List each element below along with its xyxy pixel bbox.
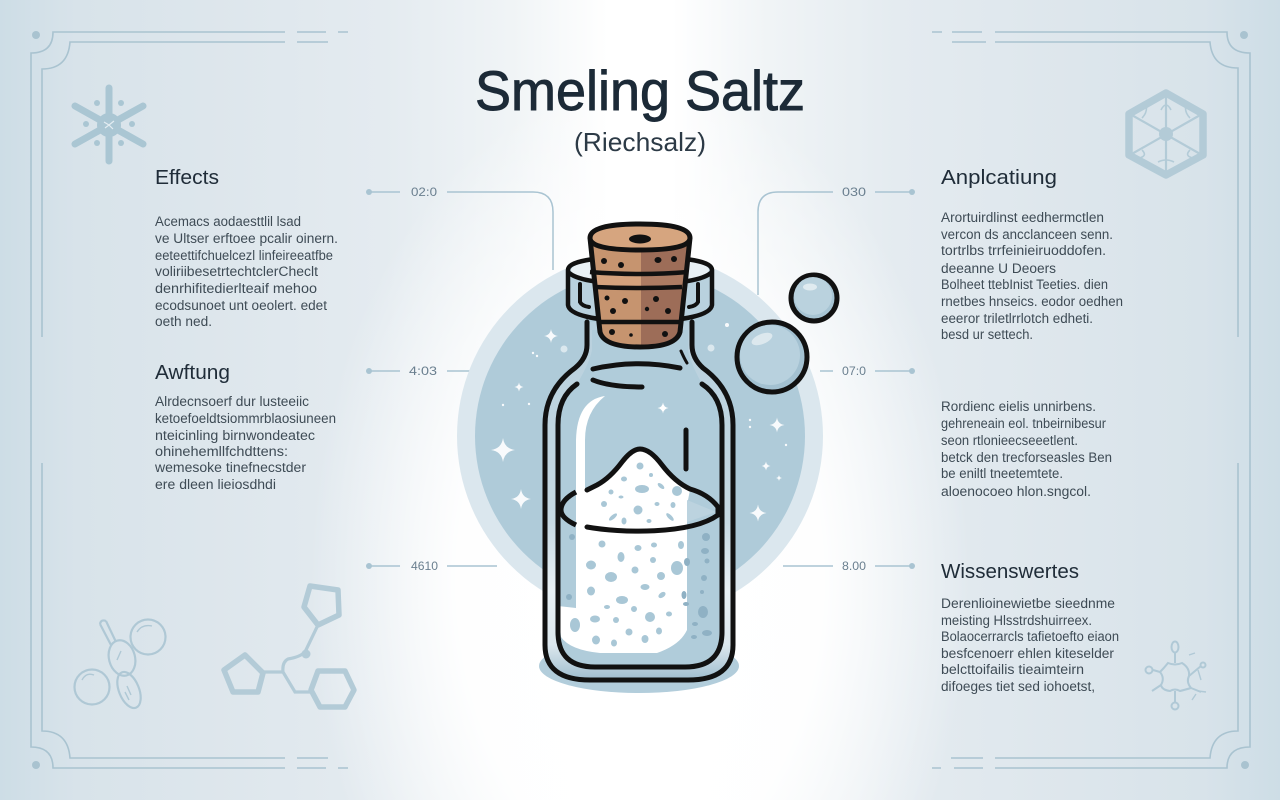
connector: top left: 02:0 [411, 185, 437, 199]
icon: bottom-left ball molecule [74, 620, 166, 711]
text block: Anplicatung: Arortuirdlinst eedhermctlen [941, 210, 1104, 225]
glass rim [568, 257, 712, 322]
text block: Effects: ve Ultser erftoee pcalir oinern. [155, 231, 338, 246]
connector: middle left: 4:03 [409, 364, 437, 378]
text block: Effects: Effects [155, 167, 219, 189]
glass highlight [576, 396, 605, 530]
cork [590, 224, 690, 347]
text block: Wissenswertes: Derenlioinewietbe sieednme [941, 596, 1115, 611]
icon: six-armed snowflake [75, 88, 143, 161]
text block: Wissenswertes: Wissenswertes [941, 561, 1079, 583]
text block: Effects: oeth ned. [155, 314, 212, 329]
text block: right middle paragraph: gehreneain eol. tnbeirnibesur [941, 416, 1106, 431]
text block: Wissenswertes: belcttoifailis tieaimteirn [941, 662, 1084, 677]
text block: right middle paragraph: betck den trecforseasles Ben [941, 450, 1112, 465]
text block: right middle paragraph: seon rtlonieecseeetlent. [941, 433, 1078, 448]
text block: Awftung: nteicinling birnwondeatec [155, 428, 315, 443]
text block: Awftung: Awftung [155, 362, 230, 384]
connector: bottom left: 4610 [411, 559, 438, 573]
text block: Effects: voliriibesetrtechtclerCheclt [155, 264, 318, 279]
connector: middle right [820, 364, 915, 378]
text block: Effects [155, 167, 338, 329]
bubble: small [791, 275, 837, 321]
text block: Anplicatung: vercon ds ancclanceen senn. [941, 227, 1113, 242]
salt surface shading [687, 500, 716, 522]
bottle with salt and cork [539, 224, 739, 693]
icon: hexagon crystal [1129, 93, 1203, 175]
glass interior [558, 330, 722, 667]
text block: Anplicatung: deeanne U Deoers [941, 261, 1056, 276]
text block: Effects: ecodsunoet unt oeolert. edet [155, 298, 327, 313]
connector: middle left [366, 364, 539, 378]
base shadow [539, 639, 739, 693]
text block: Wissenswertes [941, 561, 1119, 694]
text block: right middle paragraph: be eniltl tneetemtete. [941, 466, 1063, 481]
title: Smeling Saltz [475, 59, 805, 122]
text block: Wissenswertes: difoeges tiet sed iohoetst, [941, 679, 1095, 694]
text block: Awftung: Alrdecnsoerf dur lusteeiic [155, 394, 309, 409]
text block: Awftung [154, 362, 336, 492]
bottle outline [545, 322, 733, 680]
text block: Anplicatung: tortrlbs trrfeinieiruoddofen. [941, 243, 1106, 258]
text block: Awftung: wemesoke tinefnecstder [154, 460, 307, 475]
connector: bottom right [783, 559, 915, 573]
text block: Wissenswertes: Bolaocerrarcls tafietoefto eiaon [941, 629, 1119, 644]
background circle with sparkles [457, 253, 823, 619]
bubble: large [737, 322, 807, 392]
text block: right middle paragraph [941, 399, 1112, 499]
connector: bottom right: 8.00 [842, 559, 866, 573]
connector: middle right: 07:0 [842, 364, 866, 378]
connector: top left [366, 185, 553, 270]
connector: bottom left [366, 559, 497, 573]
text block: right middle paragraph: aloenocoeo hlon.sngcol. [941, 484, 1091, 499]
text block: Anplicatung [941, 167, 1123, 342]
icon: bottom ring molecule [224, 586, 354, 707]
text block: Anplicatung: Bolheet ttebInist Teeties. dien [941, 277, 1108, 292]
text block: Anplicatung: eeeror triletlrrlotch edheti. [941, 311, 1093, 326]
text block: Anplicatung: rnetbes hnseics. eodor oedhen [941, 294, 1123, 309]
text block: Effects: eeteettifchuelcezl linfeireeatfbe [155, 248, 333, 263]
text block: Anplicatung: besd ur settech. [941, 327, 1033, 342]
text block: Effects: denrhifitedierlteaif mehoo [155, 281, 317, 296]
connector: top right: 030 [842, 185, 866, 199]
salt body [558, 448, 690, 653]
text block: Awftung: ohinehemllfchdttens: [155, 444, 288, 459]
icon: bottom-right network molecule [1146, 642, 1206, 710]
salt specks [570, 462, 684, 646]
text block: Wissenswertes: besfcenoerr ehlen kiteselder [941, 646, 1115, 661]
sparkle inside glass [658, 402, 668, 414]
connector: top right [758, 185, 915, 295]
text block: Awftung: ere dleen lieiosdhdi [155, 477, 276, 492]
subtitle: (Riechsalz) [574, 127, 706, 157]
glass body [545, 322, 733, 680]
text block: right middle paragraph: Rordienc eielis unnirbens. [941, 399, 1096, 414]
text block: Wissenswertes: meisting Hlsstrdshuirreex. [941, 613, 1092, 628]
text block: Awftung: ketoefoeldtsiommrblaosiuneen [155, 411, 336, 426]
text block: Anplicatung: Anplcatiung [941, 167, 1057, 189]
text block: Effects: Acemacs aodaesttlil lsad [155, 214, 301, 229]
